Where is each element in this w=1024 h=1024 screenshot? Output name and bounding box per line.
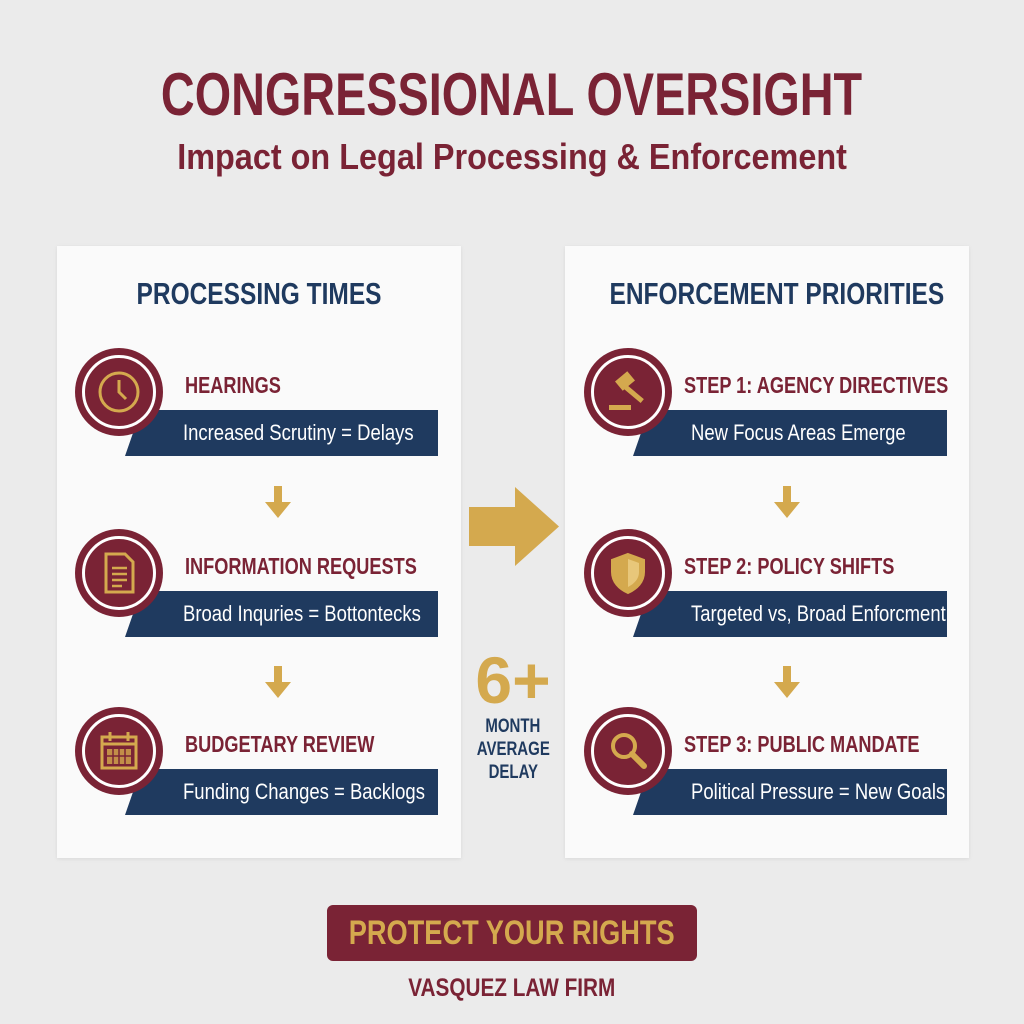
banner [633,591,947,637]
banner: Increased Scrutiny = Delays [183,420,414,445]
step 1 [584,348,948,456]
step title: STEP 2: POLICY SHIFTS [684,553,894,579]
heading: PROCESSING TIMES [137,276,381,311]
step 3 [584,707,947,815]
heading: ENFORCEMENT PRIORITIES [609,276,944,311]
step title: HEARINGS [185,372,281,398]
icon: gavel [584,348,672,436]
panel: processing times [57,246,461,858]
arrow down [774,486,800,518]
banner [125,410,438,456]
banner: Funding Changes = Backlogs [183,779,425,804]
arrow down [265,486,291,518]
banner: Broad Inquries = Bottontecks [183,601,421,626]
banner: New Focus Areas Emerge [691,420,906,445]
icon: magnifier [584,707,672,795]
step title: INFORMATION REQUESTS [185,553,417,579]
stat: 6+ month delay: AVERAGE [476,739,550,760]
big arrow [469,487,559,566]
stat: 6+ month delay [475,643,551,783]
icon: clock [75,348,163,436]
banner [125,769,438,815]
panel: enforcement priorities [565,246,969,858]
step 2 [584,529,947,637]
stat: 6+ month delay: DELAY [488,762,538,783]
subtitle: Impact on Legal Processing & Enforcement [177,136,847,177]
stat: 6+ month delay: MONTH [485,716,541,737]
footer: firm name: VASQUEZ LAW FIRM [408,974,616,1002]
icon: document [75,529,163,617]
banner [633,410,947,456]
step title: BUDGETARY REVIEW [185,731,374,757]
step: budgetary review [75,707,438,815]
arrow down [774,666,800,698]
step: information requests [75,529,438,637]
arrow down [265,666,291,698]
icon: shield [584,529,672,617]
step: hearings [75,348,438,456]
button text: PROTECT YOUR RIGHTS [349,914,675,952]
title: CONGRESSIONAL OVERSIGHT [161,61,863,128]
banner: Political Pressure = New Goals [691,779,945,804]
banner: Targeted vs, Broad Enforcment [691,601,946,626]
icon: calendar [75,707,163,795]
banner [633,769,947,815]
banner [125,591,438,637]
step title: STEP 1: AGENCY DIRECTIVES [684,372,948,398]
button: protect your rights [327,905,697,961]
step title: STEP 3: PUBLIC MANDATE [684,731,920,757]
stat: 6+ month delay: 6+ [475,643,551,717]
